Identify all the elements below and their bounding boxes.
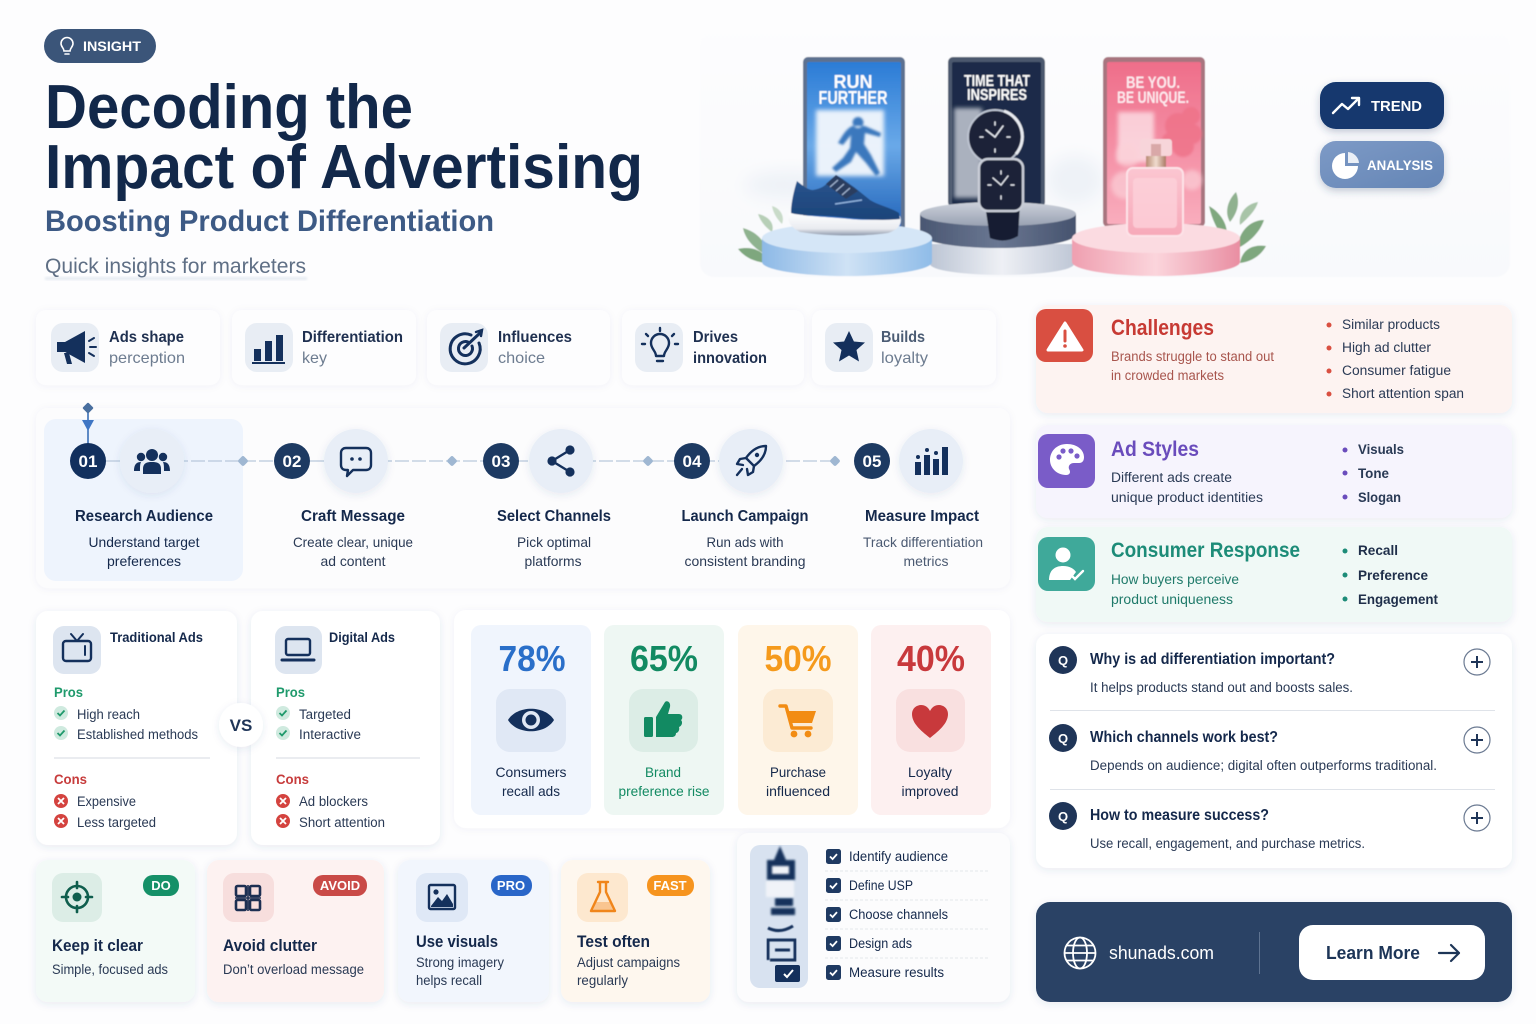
tip card: use visuals: helps recall xyxy=(416,973,482,988)
benefit: builds loyalty: Builds xyxy=(881,329,925,346)
tip card: avoid clutter xyxy=(207,860,384,1002)
panel: challenges xyxy=(1036,305,1512,413)
step 02: craft message xyxy=(274,429,413,569)
benefit: builds loyalty: loyalty xyxy=(881,350,928,367)
benefit: influences choice: Influences xyxy=(498,329,572,346)
step 04: launch campaign xyxy=(674,429,808,569)
check item: define usp: Define USP xyxy=(849,878,913,893)
comparison: digital ads card: Digital Ads xyxy=(329,629,395,645)
podium: blue xyxy=(762,223,932,276)
stats panel xyxy=(454,610,1010,828)
title: Decoding the xyxy=(45,73,413,142)
faq item 3: How to measure success? xyxy=(1090,807,1269,824)
benefit: drives innovation: innovation xyxy=(693,350,767,367)
step 03: select channels xyxy=(483,429,611,569)
tip card: use visuals xyxy=(398,860,549,1002)
button: analysis xyxy=(1320,141,1444,188)
pros list xyxy=(54,706,198,742)
panel: challenges: Brands struggle to stand out xyxy=(1111,349,1274,364)
benefit: drives innovation xyxy=(622,310,804,385)
comparison: traditional ads card: Pros xyxy=(54,684,83,700)
step 03: select channels: 03 xyxy=(492,452,510,471)
tagline: Quick insights for marketers xyxy=(45,255,306,278)
badge: insight: INSIGHT xyxy=(83,38,141,54)
check item: define usp xyxy=(826,878,913,893)
panel: consumer response xyxy=(1036,527,1512,622)
step 05: measure impact: metrics xyxy=(904,553,948,569)
vs badge: VS xyxy=(230,716,252,735)
ad display: be you: BE UNIQUE. xyxy=(1117,88,1189,107)
illustration: checklist tile xyxy=(750,845,808,988)
benefit: ads shape perception: perception xyxy=(109,350,185,367)
ad display: run further: FURTHER xyxy=(818,88,888,108)
stat: 65% xyxy=(604,625,724,815)
step 02: craft message: Craft Message xyxy=(301,508,405,525)
step 05: measure impact: Track differentiation xyxy=(863,534,983,550)
icon: tv xyxy=(53,626,101,674)
benefit: influences choice: choice xyxy=(498,350,545,367)
cons list xyxy=(54,794,156,830)
panel: consumer response: Consumer Response xyxy=(1111,539,1300,562)
challenges list xyxy=(1326,317,1464,401)
pros list: Interactive xyxy=(299,727,361,742)
tip card: avoid clutter: Don’t overload message xyxy=(223,962,364,977)
step 02: craft message: 02 xyxy=(283,452,301,471)
benefit: drives innovation: Drives xyxy=(693,329,738,346)
consumer response list: Engagement xyxy=(1358,591,1438,607)
check item: choose channels: Choose channels xyxy=(849,907,948,922)
pros list: Established methods xyxy=(77,727,198,742)
benefit: ads shape perception: Ads shape xyxy=(109,329,184,346)
benefit: ads shape perception xyxy=(36,310,220,385)
panel: ad styles: Different ads create xyxy=(1111,470,1232,485)
step 02: craft message: ad content xyxy=(320,553,386,569)
button: analysis: ANALYSIS xyxy=(1367,157,1433,173)
step 05: measure impact xyxy=(854,429,983,569)
podium: grey lower xyxy=(930,244,1074,275)
faq item 2: Depends on audience; digital often outperforms traditional. xyxy=(1090,758,1437,773)
benefit: differentiation key: key xyxy=(302,350,327,367)
stat: 65%: 65% xyxy=(630,638,698,679)
cons list xyxy=(276,794,385,830)
title: Impact of Advertising xyxy=(45,133,643,202)
button: learn more xyxy=(1299,925,1485,980)
ad styles list: Tone xyxy=(1358,465,1389,481)
tip card: use visuals: Strong imagery xyxy=(416,955,504,970)
step 01: research audience: Research Audience xyxy=(75,508,213,525)
step 04: launch campaign: consistent branding xyxy=(684,553,806,569)
panel: faq xyxy=(1036,634,1512,868)
hero illustration: three ad displays on podiums xyxy=(700,30,1510,277)
icon: globe xyxy=(1064,938,1096,968)
step 03: select channels: Pick optimal xyxy=(517,534,591,550)
button: trend xyxy=(1320,82,1444,129)
stat: 78%: 78% xyxy=(498,638,566,679)
highlight: active step xyxy=(44,419,243,581)
pros list: Targeted xyxy=(299,707,351,722)
product: perfume xyxy=(1127,139,1183,236)
stat: 78%: recall ads xyxy=(502,783,560,799)
tip card: avoid clutter: Avoid clutter xyxy=(223,937,318,955)
stat: 78% xyxy=(471,625,591,815)
product: sneaker xyxy=(788,175,901,236)
faq item 2 xyxy=(1049,724,1490,773)
button: learn more: Learn More xyxy=(1326,942,1420,963)
stat: 50% xyxy=(738,625,858,815)
cons list: Less targeted xyxy=(77,815,156,830)
comparison: digital ads card: Cons xyxy=(276,771,309,787)
tip card: keep it clear xyxy=(36,860,195,1002)
stat: 50%: Purchase xyxy=(770,764,826,780)
cons list: Expensive xyxy=(77,794,136,809)
ad display: be you xyxy=(1103,57,1205,227)
stat: 78%: Consumers xyxy=(496,764,566,780)
stat: 50%: 50% xyxy=(764,638,832,679)
ad display: be you: BE YOU. xyxy=(1126,73,1180,92)
stat: 40% xyxy=(871,625,991,815)
stat: 40%: improved xyxy=(902,783,958,799)
comparison: digital ads card: Pros xyxy=(276,684,305,700)
step 01: research audience: Understand target xyxy=(88,534,200,550)
challenges list: High ad clutter xyxy=(1342,340,1432,355)
subtitle: Boosting Product Differentiation xyxy=(45,205,494,238)
faq item 1: Q xyxy=(1058,653,1068,668)
icon: warning xyxy=(1036,309,1093,362)
connector line xyxy=(106,455,841,467)
benefit: differentiation key: Differentiation xyxy=(302,329,403,346)
benefit: builds loyalty xyxy=(812,310,996,385)
faq item 1: It helps products stand out and boosts sales. xyxy=(1090,680,1353,695)
step 04: launch campaign: Run ads with xyxy=(706,534,784,550)
vs badge xyxy=(219,703,263,747)
faq item 3 xyxy=(1049,802,1490,851)
challenges list: Similar products xyxy=(1342,317,1440,332)
stat: 40%: 40% xyxy=(897,638,965,679)
ad display: time that inspires xyxy=(948,57,1045,207)
check item: design ads xyxy=(826,936,912,951)
pin marker xyxy=(82,402,94,444)
cons list: Short attention xyxy=(299,815,385,830)
tip card: keep it clear: Simple, focused ads xyxy=(52,962,168,977)
tip card: use visuals: PRO xyxy=(497,878,525,893)
icon: palette xyxy=(1038,434,1095,488)
faq item 1: Why is ad differentiation important? xyxy=(1090,651,1335,668)
faq item 2: Which channels work best? xyxy=(1090,729,1278,746)
button: trend: TREND xyxy=(1371,98,1422,115)
consumer response list: Recall xyxy=(1358,542,1398,558)
step 05: measure impact: Measure Impact xyxy=(865,508,980,525)
tip card: test often: FAST xyxy=(653,878,687,893)
check item: measure results: Measure results xyxy=(849,965,944,980)
ad styles list xyxy=(1342,441,1404,505)
icon: laptop xyxy=(275,626,322,674)
faq item 2: Q xyxy=(1058,731,1068,746)
step 04: launch campaign: 04 xyxy=(683,452,702,471)
tip card: test often xyxy=(561,860,710,1002)
stat: 40%: Loyalty xyxy=(908,764,952,780)
leaves left xyxy=(738,206,783,263)
step 01: research audience: preferences xyxy=(107,553,181,569)
header: title block xyxy=(44,29,643,280)
panel: ad styles xyxy=(1036,425,1512,518)
stat: 50%: influenced xyxy=(766,783,830,799)
podium: pink xyxy=(1072,223,1240,276)
ad styles list: Visuals xyxy=(1358,441,1404,457)
step 03: select channels: platforms xyxy=(524,553,582,569)
badge: insight xyxy=(44,29,156,63)
step 05: measure impact: 05 xyxy=(863,452,881,471)
footer call to action xyxy=(1036,902,1512,1002)
challenges list: Short attention span xyxy=(1342,386,1464,401)
comparison: digital ads card xyxy=(251,611,440,845)
pros list: High reach xyxy=(77,707,140,722)
comparison: traditional ads card: Traditional Ads xyxy=(110,629,203,645)
website: shunads.com xyxy=(1109,943,1214,963)
tip card: keep it clear: Keep it clear xyxy=(52,937,144,955)
panel: consumer response: product uniqueness xyxy=(1111,592,1233,607)
title xyxy=(45,73,643,202)
podium: dark upper xyxy=(920,202,1076,248)
panel: ad styles: Ad Styles xyxy=(1111,438,1199,461)
benefits row xyxy=(36,310,996,385)
faq item 3: Q xyxy=(1058,809,1068,824)
panel: challenges: in crowded markets xyxy=(1111,368,1224,383)
icon: person check xyxy=(1038,537,1095,591)
ad display: run further: RUN xyxy=(834,72,872,92)
step 01: research audience: 01 xyxy=(79,452,97,471)
panel: consumer response: How buyers perceive xyxy=(1111,572,1239,587)
step 01: research audience xyxy=(70,429,213,569)
tip card: use visuals: Use visuals xyxy=(416,933,498,951)
challenges list: Consumer fatigue xyxy=(1342,363,1451,378)
tip card: test often: Test often xyxy=(577,933,650,951)
process timeline panel xyxy=(36,402,1010,588)
consumer response list xyxy=(1342,542,1438,607)
tip card: avoid clutter: AVOID xyxy=(320,878,360,893)
cons list: Ad blockers xyxy=(299,794,368,809)
step 03: select channels: Select Channels xyxy=(497,508,611,525)
faq item 3: Use recall, engagement, and purchase metrics. xyxy=(1090,836,1365,851)
step 02: craft message: Create clear, unique xyxy=(293,534,413,550)
tip card: test often: regularly xyxy=(577,973,628,988)
leaves right xyxy=(1209,192,1266,263)
faq item 1 xyxy=(1049,646,1490,695)
ad display: time that inspires: INSPIRES xyxy=(967,87,1027,104)
checklist panel xyxy=(737,833,1010,1002)
panel: ad styles: unique product identities xyxy=(1111,490,1263,505)
ad styles list: Slogan xyxy=(1358,489,1401,505)
ad display: run further xyxy=(803,57,905,232)
comparison: traditional ads card: Cons xyxy=(54,771,87,787)
tip card: test often: Adjust campaigns xyxy=(577,955,680,970)
tip card: keep it clear: DO xyxy=(151,878,171,893)
check item: design ads: Design ads xyxy=(849,936,912,951)
panel: challenges: Challenges xyxy=(1111,315,1214,340)
ad display: time that inspires: TIME THAT xyxy=(964,73,1030,90)
benefit: differentiation key xyxy=(232,310,416,385)
benefit: influences choice xyxy=(427,310,610,385)
check item: identify audience: Identify audience xyxy=(849,849,948,864)
comparison: traditional ads card xyxy=(36,611,237,845)
pros list xyxy=(276,706,361,742)
product: watch xyxy=(968,110,1023,241)
stat: 65%: Brand xyxy=(645,764,681,780)
consumer response list: Preference xyxy=(1358,567,1428,583)
stat: 65%: preference rise xyxy=(618,783,710,799)
step 04: launch campaign: Launch Campaign xyxy=(682,508,808,525)
